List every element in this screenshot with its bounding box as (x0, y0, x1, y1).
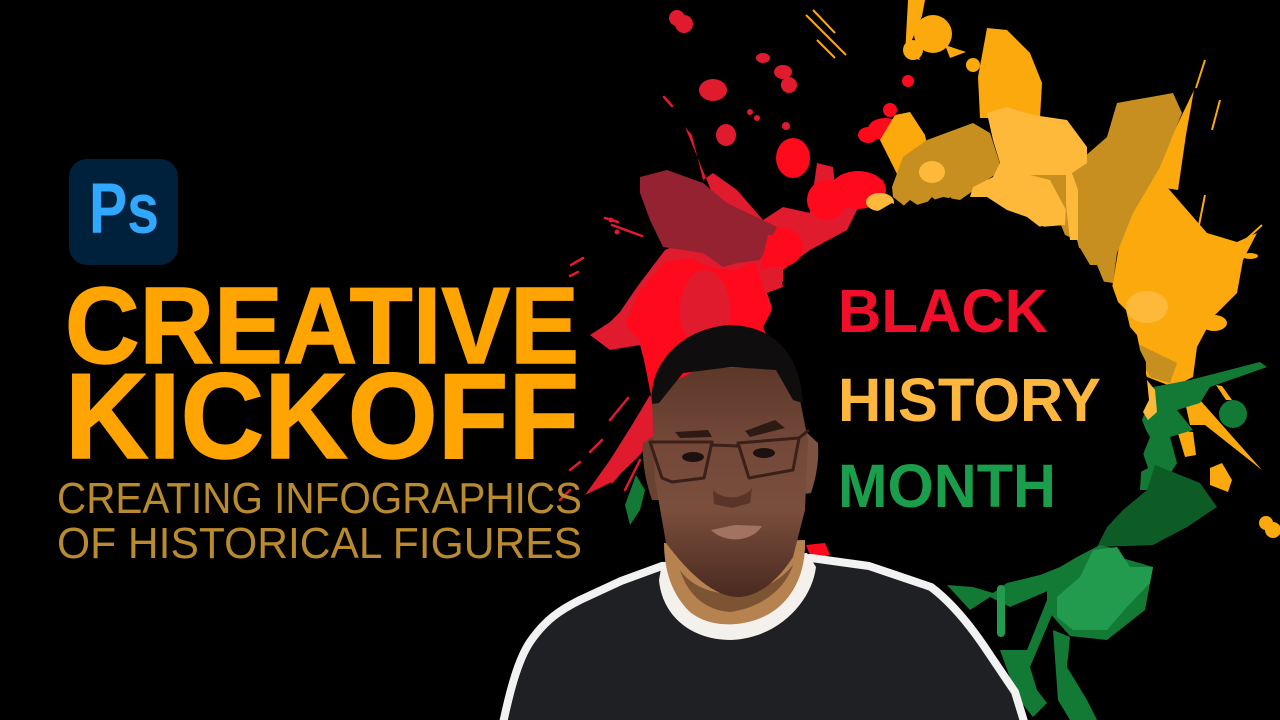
dark gold paint patch: left (892, 123, 1002, 208)
badge text: Black History Month: HISTORY (838, 366, 1101, 434)
crimson patch over red (680, 270, 730, 350)
left arm (947, 545, 1120, 610)
Photoshop icon (69, 159, 178, 265)
subtitle: CREATING INFOGRAPHICS (57, 474, 582, 523)
gold paint splatter (806, 0, 1280, 538)
mouth (711, 525, 762, 539)
right ear (798, 432, 818, 495)
subtitle (57, 474, 582, 568)
head (652, 368, 808, 597)
lower streak over green (1185, 400, 1262, 470)
red droplets (608, 10, 797, 234)
bright red patches (759, 75, 914, 267)
bright red body (625, 258, 772, 420)
bright green paint patch (1057, 547, 1153, 630)
green paint splatter (625, 362, 1267, 720)
light gold paint patch (970, 107, 1087, 240)
badge text: Black History Month: MONTH (838, 452, 1056, 520)
badge text: Black History Month (838, 277, 1101, 520)
glasses (650, 430, 809, 482)
dark green blob (1219, 400, 1247, 428)
badge text: Black History Month: BLACK (838, 277, 1048, 345)
neck scarf (664, 540, 805, 624)
right body (1110, 183, 1257, 387)
left ear (643, 435, 665, 500)
title (65, 265, 579, 484)
presenter portrait (502, 325, 1026, 720)
outline behind bright patch (1047, 550, 1153, 640)
title: KICKOFF (65, 348, 579, 484)
dark green body (1097, 465, 1217, 547)
dark gold paint patch: right (1040, 93, 1182, 283)
eyebrows (675, 420, 785, 438)
bright green bar (997, 585, 1005, 637)
Photoshop icon: Ps (89, 170, 159, 249)
red paint splatter (560, 10, 914, 500)
white collar (659, 553, 816, 640)
light gold spots (866, 161, 1168, 323)
dark gold inset (1030, 175, 1066, 210)
lower drip (1053, 630, 1097, 720)
red and green neck patch (806, 543, 830, 560)
nose (713, 488, 752, 508)
red streak flecks (560, 97, 672, 500)
bright red highlight (760, 235, 800, 270)
title: CREATIVE (65, 265, 579, 387)
right-side flecks (1201, 315, 1227, 331)
top blob (905, 0, 925, 60)
shirt (502, 558, 1026, 720)
green bits left of head (625, 475, 645, 525)
black badge with sawtooth edge (766, 197, 1153, 590)
light gold rim spots on badge edge (1143, 380, 1157, 420)
dark red paint patch (640, 170, 777, 267)
lobe by red (880, 112, 930, 190)
eyes (682, 448, 775, 462)
lower-left drip (1000, 600, 1052, 717)
brush streaks (1145, 90, 1194, 190)
hair (652, 325, 803, 404)
dark gold patch: lower (1130, 340, 1177, 383)
paint streak below body (585, 395, 665, 495)
crimson branch (590, 127, 885, 400)
tall lobe (978, 28, 1042, 118)
subtitle: OF HISTORICAL FIGURES (57, 519, 582, 568)
scarf shadow (680, 565, 793, 612)
upper green (1140, 362, 1267, 490)
